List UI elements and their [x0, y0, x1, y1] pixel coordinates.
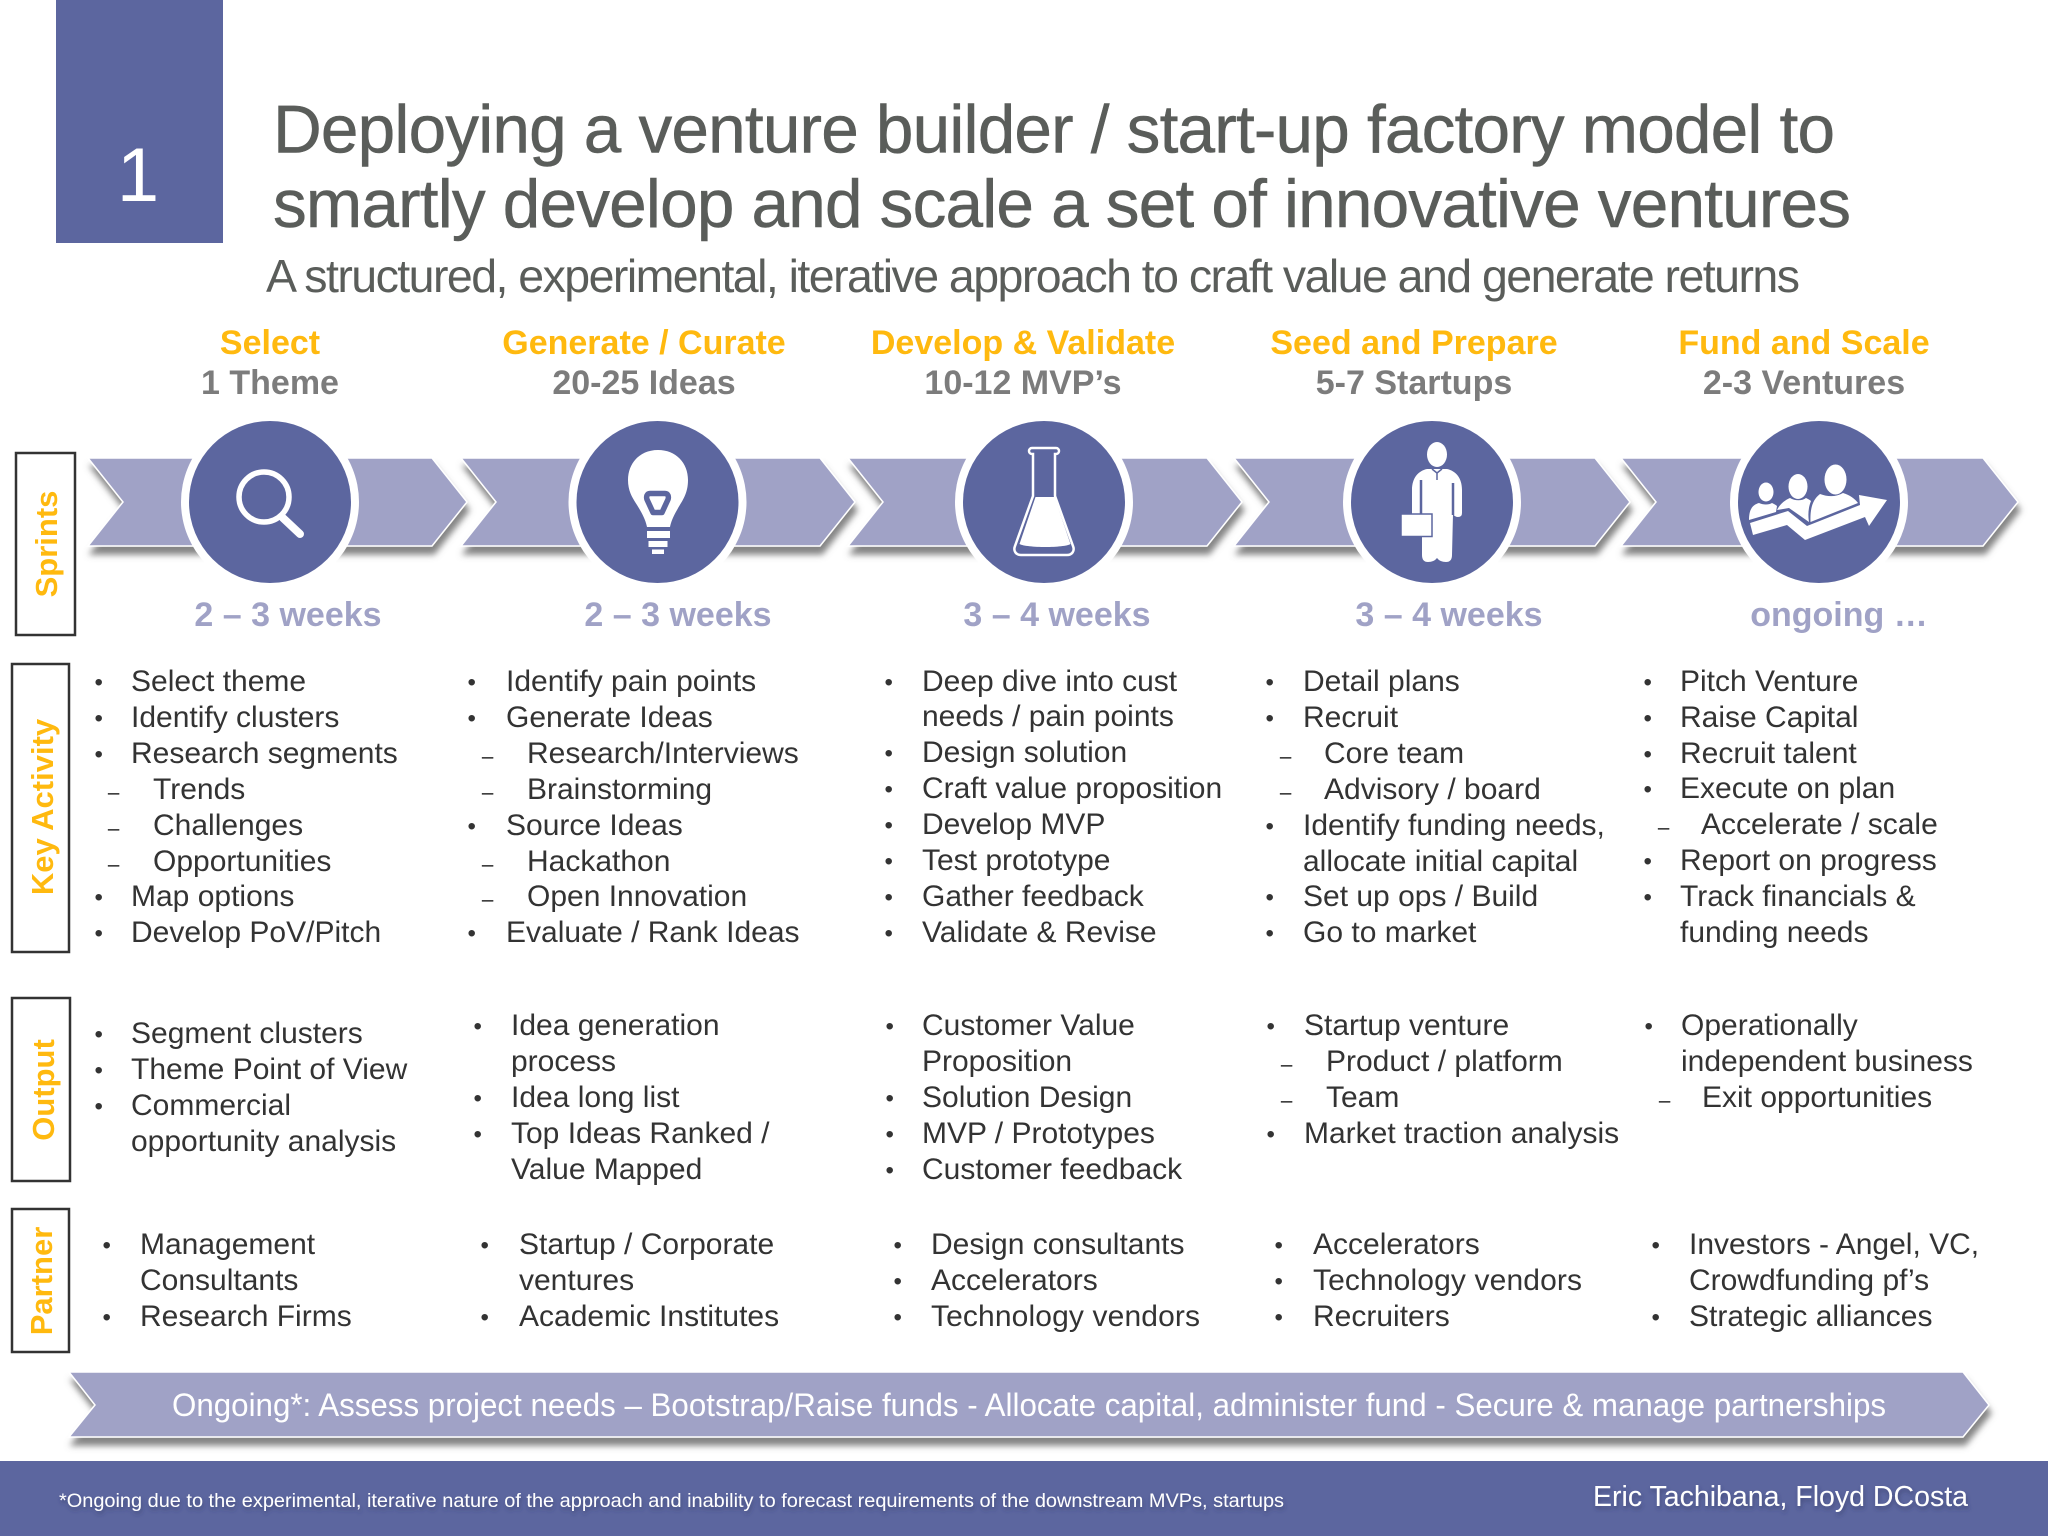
key activity: select: – — [108, 782, 120, 804]
key activity: fund: • — [1644, 705, 1652, 732]
partner: select: • — [102, 1304, 111, 1331]
partner: generate: Academic Institutes — [519, 1300, 779, 1333]
key activity: develop: • — [884, 776, 893, 803]
output: select: Segment clusters — [131, 1017, 363, 1050]
key activity: fund: Execute on plan — [1680, 772, 1895, 805]
key activity: fund: • — [1644, 848, 1652, 875]
key activity: seed: – — [1280, 746, 1292, 768]
output: fund: Operationally — [1681, 1009, 1858, 1042]
key activity: develop — [884, 665, 1222, 949]
stage heading: seed: Seed and Prepare — [1270, 324, 1558, 362]
key activity: seed: Recruit — [1303, 701, 1399, 734]
output: generate — [474, 1009, 770, 1186]
output: seed: Team — [1326, 1081, 1399, 1114]
stage heading: select: Select — [220, 324, 320, 362]
key activity: generate: – — [482, 782, 494, 804]
partner: generate: Startup / Corporate — [519, 1228, 774, 1261]
row label: key activity — [12, 664, 69, 952]
partner: select: Consultants — [140, 1264, 298, 1297]
key activity: develop: • — [884, 669, 893, 696]
sprint durations: 3 – 4 weeks — [963, 596, 1151, 634]
output: select — [94, 1017, 408, 1158]
key activity: select: • — [94, 669, 103, 696]
key activity: select: – — [108, 854, 120, 876]
partner: seed — [1274, 1228, 1582, 1333]
key activity: select: Identify clusters — [131, 701, 339, 734]
partner: select: Management — [140, 1228, 316, 1261]
key activity: fund: • — [1644, 884, 1652, 911]
partner: fund: Strategic alliances — [1689, 1300, 1932, 1333]
key activity: develop: Design solution — [922, 736, 1127, 769]
output: fund: • — [1644, 1013, 1653, 1040]
key activity: develop: needs / pain points — [922, 700, 1174, 733]
output: generate: Idea generation — [511, 1009, 720, 1042]
stage heading: generate: 20-25 Ideas — [552, 364, 736, 402]
key activity: select: Develop PoV/Pitch — [131, 916, 381, 949]
row label: output: Output — [26, 1039, 61, 1141]
row label: sprints: Sprints — [29, 491, 64, 597]
key activity: generate: Brainstorming — [527, 773, 712, 806]
key activity: select: Research segments — [131, 737, 398, 770]
partner: develop: • — [894, 1268, 902, 1295]
output: develop: Customer feedback — [922, 1153, 1183, 1186]
partner: develop: Design consultants — [931, 1228, 1184, 1261]
output: seed: Startup venture — [1304, 1009, 1509, 1042]
key activity: generate: Source Ideas — [506, 809, 683, 842]
key activity: seed — [1266, 665, 1605, 949]
stage heading: seed: 5-7 Startups — [1316, 364, 1512, 402]
stage heading: select — [201, 324, 339, 402]
key activity: seed: • — [1266, 813, 1274, 840]
output: seed: – — [1281, 1054, 1293, 1076]
key activity: seed: • — [1266, 884, 1274, 911]
key activity: develop: • — [884, 848, 893, 875]
key activity: fund: – — [1658, 817, 1670, 839]
partner: seed: • — [1274, 1304, 1283, 1331]
output: select: • — [94, 1057, 103, 1084]
output: generate: • — [474, 1085, 482, 1112]
row label: sprints — [16, 453, 75, 635]
stage headings — [201, 324, 1930, 402]
stage heading: fund — [1678, 324, 1930, 402]
output: develop: Customer Value — [922, 1009, 1135, 1042]
partner: generate — [480, 1228, 779, 1333]
key activity: select: – — [108, 818, 120, 840]
key activity: fund: • — [1644, 776, 1652, 803]
key activity: develop: Test prototype — [922, 844, 1110, 877]
key activity: fund: • — [1644, 669, 1652, 696]
key activity: select: Trends — [153, 773, 245, 806]
partner: generate: • — [480, 1304, 489, 1331]
partner: develop — [894, 1228, 1200, 1333]
key activity: fund: Track financials & — [1680, 880, 1916, 913]
key activity: develop: • — [884, 920, 893, 947]
sprint durations: ongoing … — [1750, 596, 1928, 634]
key activity: fund: Recruit talent — [1680, 737, 1857, 770]
partner: generate: • — [480, 1232, 489, 1259]
key activity: generate: – — [482, 854, 494, 876]
stage heading: develop: Develop & Validate — [871, 324, 1175, 362]
key activity: seed: Detail plans — [1303, 665, 1460, 698]
sprint durations — [194, 596, 1928, 634]
output: select: Commercial — [131, 1089, 291, 1122]
subtitle: A structured, experimental, iterative approach to craft value and generate returns — [266, 250, 1800, 302]
partner: seed: Recruiters — [1313, 1300, 1450, 1333]
partner: develop: Accelerators — [931, 1264, 1098, 1297]
key activity: seed: • — [1266, 669, 1274, 696]
key activity: generate: – — [482, 889, 494, 911]
key activity: generate: Evaluate / Rank Ideas — [506, 916, 800, 949]
output: seed: • — [1266, 1121, 1275, 1148]
output: generate: Value Mapped — [511, 1153, 702, 1186]
key activity: develop: Validate & Revise — [922, 916, 1157, 949]
partner: seed: • — [1274, 1268, 1283, 1295]
key activity: select: • — [94, 884, 103, 911]
stage heading: seed — [1270, 324, 1558, 402]
key activity: seed: Identify funding needs, — [1303, 809, 1605, 842]
output: develop: • — [886, 1013, 894, 1040]
output: fund: independent business — [1681, 1045, 1973, 1078]
row label: output — [12, 998, 70, 1181]
key activity: select: Map options — [131, 880, 294, 913]
key activity: generate — [468, 665, 800, 949]
key activity: seed: Go to market — [1303, 916, 1477, 949]
stage heading: select: 1 Theme — [201, 364, 339, 402]
output: select: Theme Point of View — [131, 1053, 408, 1086]
row label: partner — [12, 1209, 69, 1352]
key activity: fund: funding needs — [1680, 916, 1868, 949]
key activity: generate: Open Innovation — [527, 880, 747, 913]
key activity: develop: Gather feedback — [922, 880, 1145, 913]
icon: flask — [955, 413, 1133, 591]
key activity: develop: Develop MVP — [922, 808, 1105, 841]
key activity: develop: • — [884, 884, 893, 911]
key activity: select: • — [94, 741, 103, 768]
key activity: seed: Set up ops / Build — [1303, 880, 1538, 913]
partner: fund: • — [1652, 1304, 1660, 1331]
key activity: seed: Core team — [1324, 737, 1464, 770]
partner: generate: ventures — [519, 1264, 634, 1297]
key activity: develop: Deep dive into cust — [922, 665, 1178, 698]
key activity: generate: – — [482, 746, 494, 768]
key activity: select: Select theme — [131, 665, 306, 698]
output: seed — [1266, 1009, 1619, 1150]
key activity: fund: Pitch Venture — [1680, 665, 1858, 698]
output: develop: • — [886, 1085, 894, 1112]
stage heading: fund: Fund and Scale — [1678, 324, 1930, 362]
partner: select: Research Firms — [140, 1300, 352, 1333]
key activity: seed: • — [1266, 705, 1274, 732]
partner: seed: • — [1274, 1232, 1283, 1259]
row label: partner: Partner — [24, 1227, 59, 1335]
icon: businessman — [1343, 413, 1521, 591]
output: seed: Product / platform — [1326, 1045, 1563, 1078]
output: seed: • — [1266, 1013, 1275, 1040]
output: develop: • — [886, 1157, 894, 1184]
key activity: select: Opportunities — [153, 845, 331, 878]
key activity: generate: Research/Interviews — [527, 737, 799, 770]
title — [273, 92, 1851, 242]
output: seed: Market traction analysis — [1304, 1117, 1619, 1150]
footer band — [0, 1461, 2048, 1536]
sprint durations: 2 – 3 weeks — [194, 596, 382, 634]
sprint durations: 3 – 4 weeks — [1355, 596, 1543, 634]
section number block: 1 — [117, 133, 159, 218]
output: develop: Solution Design — [922, 1081, 1132, 1114]
output: develop: MVP / Prototypes — [922, 1117, 1155, 1150]
key activity: select: • — [94, 705, 103, 732]
output: develop: Proposition — [922, 1045, 1072, 1078]
partner: develop: • — [894, 1304, 902, 1331]
partner: select — [102, 1228, 352, 1333]
key activity: develop: • — [884, 740, 893, 767]
output: generate: process — [511, 1045, 616, 1078]
stage heading: fund: 2-3 Ventures — [1703, 364, 1905, 402]
output: generate: Idea long list — [511, 1081, 680, 1114]
partner: fund — [1652, 1228, 1979, 1333]
stage heading: generate — [502, 324, 786, 402]
key activity: fund: Raise Capital — [1680, 701, 1858, 734]
output: fund — [1644, 1009, 1973, 1114]
section number block — [56, 0, 223, 243]
partner: seed: Technology vendors — [1313, 1264, 1582, 1297]
key activity: generate: Identify pain points — [506, 665, 756, 698]
output: develop — [886, 1009, 1183, 1186]
output: generate: • — [474, 1013, 482, 1040]
key activity: develop: • — [884, 812, 893, 839]
key activity: select: • — [94, 920, 103, 947]
title: Deploying a venture builder / start-up factory model to — [273, 92, 1835, 168]
footnote: *Ongoing due to the experimental, iterative nature of the approach and inability to forecast requirements of the downstream MVPs, startups — [59, 1490, 1284, 1512]
key activity: fund: Report on progress — [1680, 844, 1937, 877]
key activity: develop: Craft value proposition — [922, 772, 1222, 805]
partner: develop: • — [894, 1232, 902, 1259]
key activity: seed: allocate initial capital — [1303, 845, 1578, 878]
key activity: seed: – — [1280, 782, 1292, 804]
authors: Eric Tachibana, Floyd DCosta — [1593, 1481, 1969, 1513]
partner: fund: Investors - Angel, VC, — [1689, 1228, 1979, 1261]
output: generate: • — [474, 1121, 482, 1148]
title: smartly develop and scale a set of innovative ventures — [273, 167, 1851, 242]
partner: fund: • — [1652, 1232, 1660, 1259]
key activity: seed: Advisory / board — [1324, 773, 1541, 806]
output: develop: • — [886, 1121, 894, 1148]
stage heading: develop — [871, 324, 1175, 402]
key activity: select — [94, 665, 398, 949]
icon: magnifier — [181, 413, 359, 591]
output: fund: Exit opportunities — [1702, 1081, 1932, 1114]
key activity: fund: Accelerate / scale — [1701, 808, 1938, 841]
partner: fund: Crowdfunding pf’s — [1689, 1264, 1929, 1297]
key activity: generate: • — [468, 813, 476, 840]
key activity: generate: Hackathon — [527, 845, 670, 878]
output: select: opportunity analysis — [131, 1125, 396, 1158]
ongoing activities arrow — [69, 1372, 1989, 1437]
output: seed: – — [1281, 1090, 1293, 1112]
icon: light bulb — [568, 413, 746, 591]
key activity: generate: • — [468, 669, 476, 696]
ongoing activities arrow: Ongoing*: Assess project needs – Bootstrap/Raise funds - Allocate capital, administer fund - Secure & manage partnerships — [172, 1387, 1886, 1423]
stage heading: generate: Generate / Curate — [502, 324, 786, 362]
output: fund: – — [1659, 1090, 1671, 1112]
output: select: • — [94, 1021, 103, 1048]
key activity: seed: • — [1266, 920, 1274, 947]
row label: key activity: Key Activity — [25, 718, 60, 895]
key activity: select: Challenges — [153, 809, 303, 842]
key activity: generate: • — [468, 705, 476, 732]
key activity: fund — [1644, 665, 1938, 949]
output: select: • — [94, 1093, 103, 1120]
partner: seed: Accelerators — [1313, 1228, 1480, 1261]
output: generate: Top Ideas Ranked / — [511, 1117, 770, 1150]
sprint durations: 2 – 3 weeks — [584, 596, 772, 634]
key activity: fund: • — [1644, 741, 1652, 768]
sprint chevrons — [88, 458, 2018, 546]
key activity: generate: Generate Ideas — [506, 701, 713, 734]
icon: team with growth arrow — [1730, 413, 1908, 591]
partner: develop: Technology vendors — [931, 1300, 1200, 1333]
key activity: generate: • — [468, 920, 476, 947]
partner: select: • — [102, 1232, 111, 1259]
stage heading: develop: 10-12 MVP’s — [924, 364, 1122, 402]
